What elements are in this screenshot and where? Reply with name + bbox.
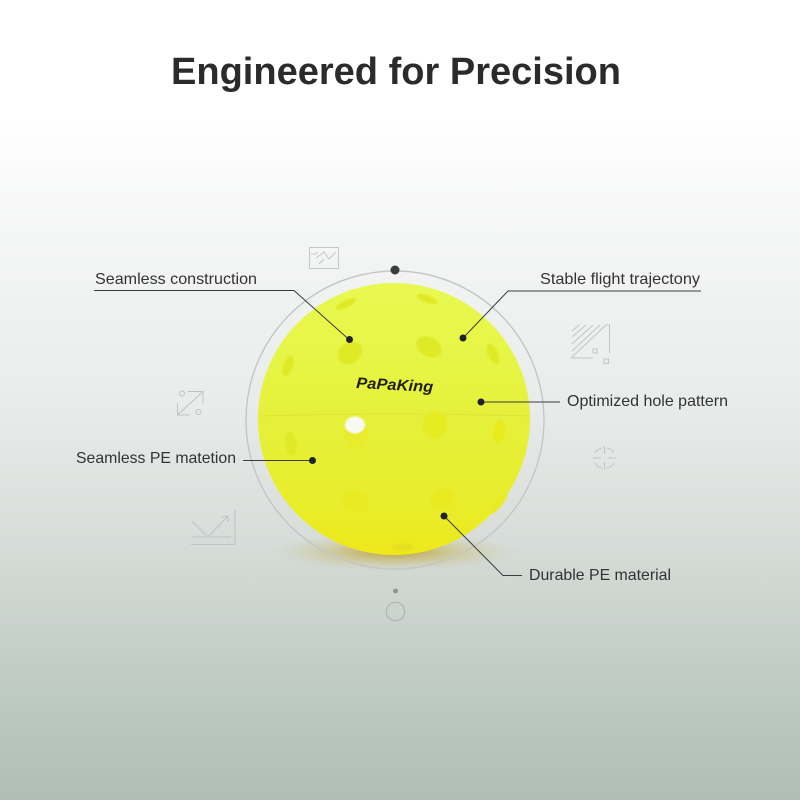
ball see-through hole <box>345 416 365 434</box>
title: Engineered for Precision <box>171 51 621 93</box>
callout: Seamless PE matetion <box>76 450 316 467</box>
bottom marker <box>386 588 405 621</box>
ball holes <box>280 292 510 550</box>
callout: Seamless construction <box>94 271 353 343</box>
callout: Seamless construction: Seamless construction <box>95 271 257 288</box>
callout: Stable flight trajectony <box>460 271 701 342</box>
callout: Durable PE material: Durable PE material <box>529 567 671 584</box>
icon: hatched triangle <box>571 325 610 364</box>
pickleball <box>258 283 530 555</box>
orbit ring <box>246 266 544 569</box>
callout: Optimized hole pattern <box>478 393 728 410</box>
callout: Durable PE material <box>440 512 671 584</box>
ball brand logo: PaPaKing <box>356 375 434 396</box>
icon: rising arrow chart <box>191 510 235 544</box>
callout: Seamless PE matetion: Seamless PE matetion <box>76 450 236 467</box>
icon: line chart box <box>310 248 338 268</box>
icon: crosshair <box>593 446 616 470</box>
callout: Optimized hole pattern: Optimized hole pattern <box>567 393 728 410</box>
callout: Stable flight trajectony: Stable flight trajectony <box>540 271 700 288</box>
icon: diagonal arrow square <box>178 391 203 415</box>
ball shadow <box>269 532 519 572</box>
